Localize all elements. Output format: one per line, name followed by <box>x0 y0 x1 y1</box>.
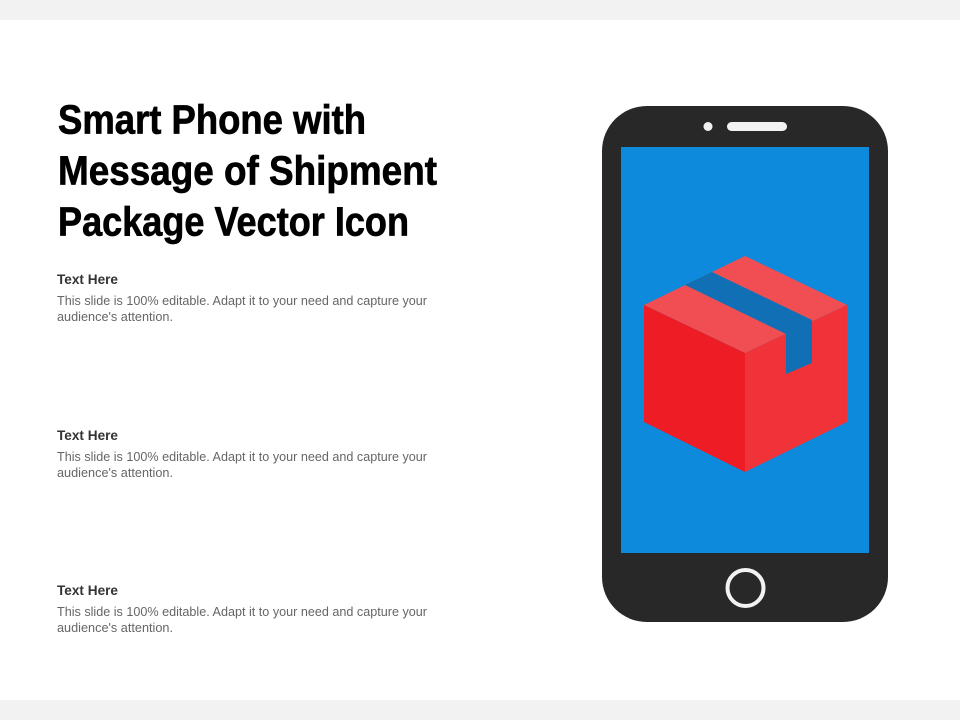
title <box>58 96 437 244</box>
screen <box>621 147 869 553</box>
camera dot <box>704 122 712 131</box>
text block 3: Text Here <box>57 582 118 598</box>
text block 1: Text Here <box>57 271 118 287</box>
text block 2: Text Here <box>57 427 118 443</box>
text block 2: This slide is 100% editable. Adapt it to your need and capture your <box>57 450 427 464</box>
title: Message of Shipment <box>58 148 437 194</box>
box right face <box>745 305 847 472</box>
phone body <box>602 106 888 622</box>
smartphone <box>602 106 888 622</box>
title: Package Vector Icon <box>58 198 409 244</box>
text block 3 <box>57 582 427 635</box>
box top <box>644 256 847 353</box>
text block 2: audience's attention. <box>57 466 173 480</box>
text block 3: audience's attention. <box>57 621 173 635</box>
box left face <box>644 305 745 472</box>
packing tape <box>685 272 812 374</box>
text block 2 <box>57 427 427 480</box>
text block 3: This slide is 100% editable. Adapt it to your need and capture your <box>57 605 427 619</box>
text block 1 <box>57 271 427 324</box>
speaker <box>727 122 787 131</box>
title: Smart Phone with <box>58 96 366 142</box>
text block 1: audience's attention. <box>57 310 173 324</box>
home button <box>728 570 764 606</box>
text block 1: This slide is 100% editable. Adapt it to your need and capture your <box>57 294 427 308</box>
icon: package box <box>644 256 847 472</box>
